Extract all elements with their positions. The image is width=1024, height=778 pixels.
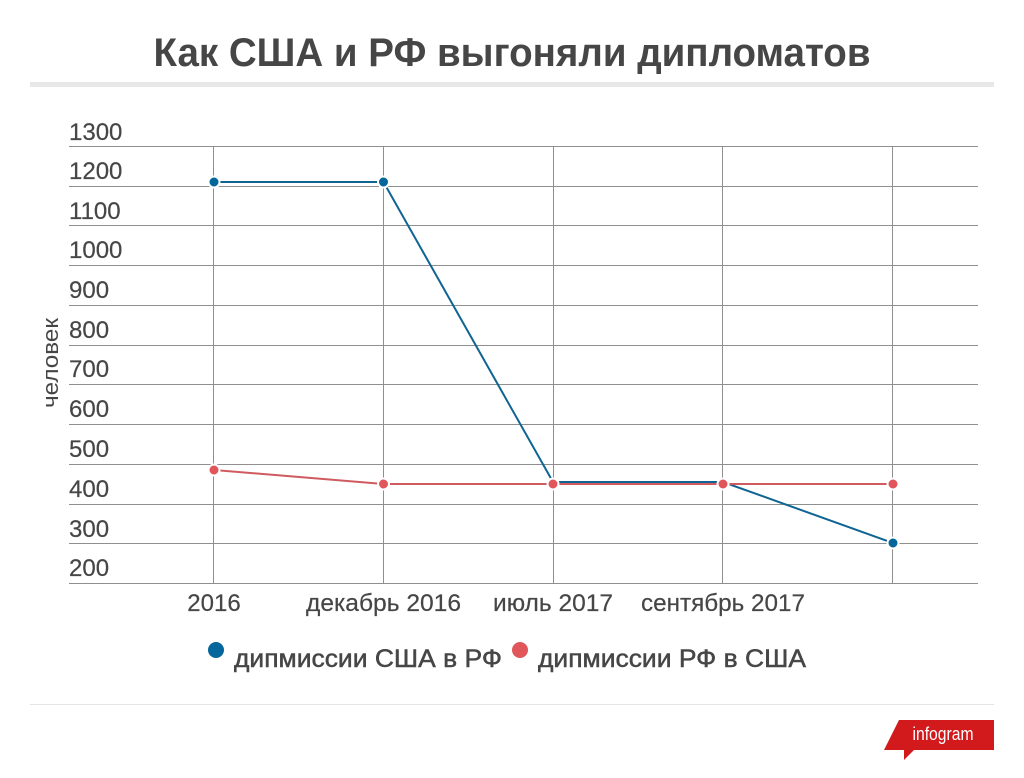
legend item: РФ в США: дипмиссии РФ в США [538,645,806,673]
y axis labels [69,119,122,582]
legend [208,642,806,673]
y axis labels: 600 [69,396,109,423]
y axis labels: 1000 [69,237,122,264]
y axis labels: 400 [69,476,109,503]
series: дипмиссии РФ в США [208,464,898,490]
title: Как США и РФ выгоняли дипломатов [154,31,870,75]
y axis labels: 200 [69,555,109,582]
y axis labels: 900 [69,277,109,304]
series: дипмиссии США в РФ [208,176,898,548]
x axis labels: 2016 [187,590,241,617]
title underline [30,82,994,87]
y axis labels: 500 [69,436,109,463]
y axis labels: 1100 [69,198,121,225]
infogram logo [884,720,994,760]
legend item: США в РФ: дипмиссии США в РФ [234,645,502,673]
x axis labels [187,590,805,617]
y axis labels: 300 [69,516,109,543]
grid [69,146,978,584]
y axis labels: 1200 [69,158,122,185]
y axis labels: 1300 [69,119,122,146]
y axis labels: 800 [69,317,109,344]
footer divider [30,704,994,705]
x axis labels: декабрь 2016 [306,590,461,617]
infogram logo: infogram [912,724,974,744]
y axis title: человек [38,318,63,408]
x axis labels: июль 2017 [493,590,613,617]
line chart [38,119,978,617]
y axis labels: 700 [69,356,109,383]
x axis labels: сентябрь 2017 [641,590,805,617]
